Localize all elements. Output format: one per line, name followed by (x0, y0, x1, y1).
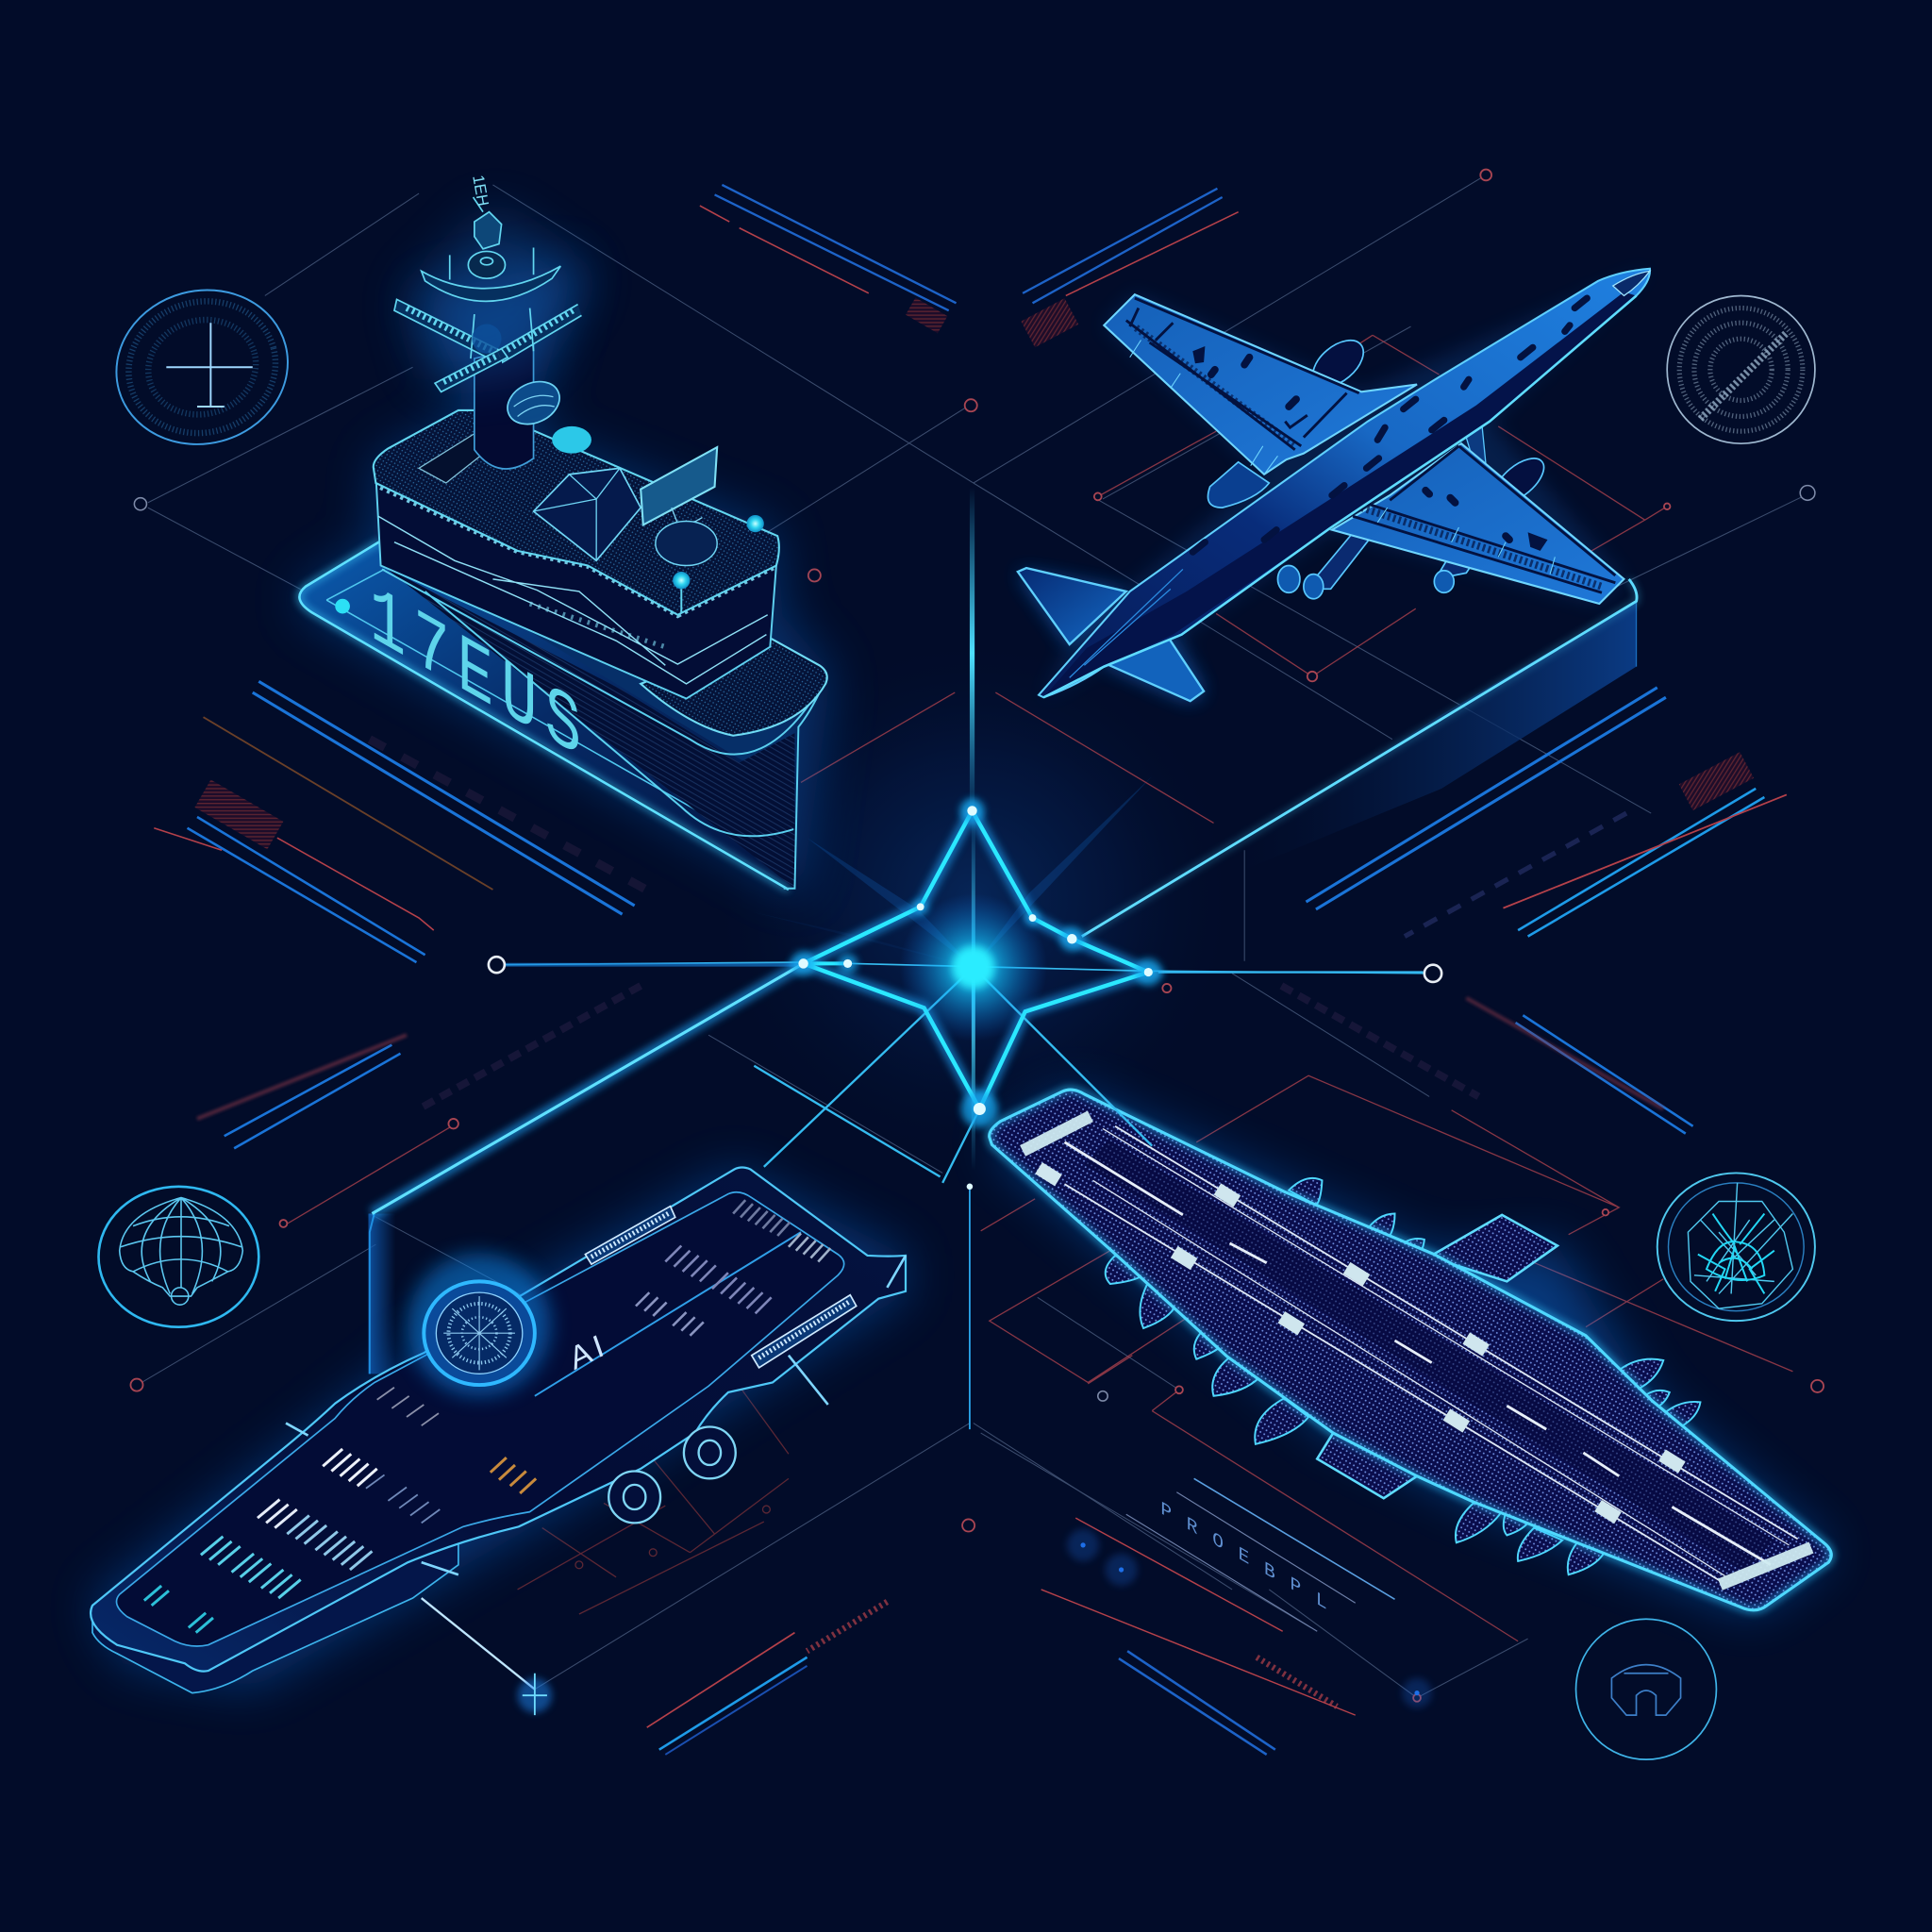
deck (990, 1090, 1831, 1610)
aircraft glow (1018, 269, 1650, 701)
pedestal (656, 521, 717, 566)
side fins (1106, 1178, 1700, 1574)
circular badge: terrain scan (1657, 1173, 1815, 1321)
plate dot (335, 599, 350, 613)
pyramid housing (534, 468, 641, 560)
device label: AI (565, 1326, 612, 1377)
circular badge: aircraft radar (99, 271, 305, 463)
tablet circuit traces (518, 1386, 789, 1614)
device top (91, 1168, 906, 1672)
trace group: bottom left (647, 1602, 887, 1755)
barcode rows (144, 1449, 536, 1633)
dial glow (408, 1253, 551, 1396)
center wedges (752, 776, 1152, 967)
device glow (92, 1170, 906, 1688)
screen panel (641, 447, 717, 525)
thin grid lines (142, 175, 1805, 1698)
pattern cone (1466, 415, 1487, 478)
blue spark dots (1067, 1529, 1432, 1707)
hair lines (496, 962, 1433, 974)
circular badge: sonar rings (1667, 295, 1815, 443)
main deck (374, 410, 779, 615)
lower sponson (1317, 1433, 1417, 1498)
upper wing (1104, 294, 1417, 475)
fuselage (1039, 269, 1650, 697)
network glow (372, 810, 1148, 1214)
ship hull and plate (299, 258, 832, 899)
deck hatch (419, 434, 492, 483)
forward deck (641, 635, 827, 736)
long arm (372, 963, 804, 1214)
star nodes (791, 798, 1162, 1190)
left end node (489, 957, 505, 973)
central star network (372, 487, 1433, 1429)
island tower (1429, 1215, 1557, 1281)
hull side (385, 567, 794, 889)
carrier glow (990, 1091, 1832, 1613)
fuselage windows (1192, 298, 1587, 552)
tail fins (1018, 568, 1126, 644)
aircraft carrier (990, 1090, 1832, 1613)
connector nodes (130, 170, 1824, 1702)
red connector lines (283, 335, 1792, 1641)
core (899, 893, 1047, 1041)
trace group: top left (700, 185, 957, 333)
plate (299, 541, 798, 890)
circular badge: globe (98, 1187, 258, 1327)
ship mast (394, 174, 591, 391)
mast column (475, 345, 534, 469)
star outline (804, 810, 1148, 1109)
aircraft (1018, 269, 1650, 701)
diagonals (754, 967, 1152, 1183)
ship name: 17EUS (370, 569, 581, 781)
lower wing (1332, 443, 1624, 604)
ship superstructure (374, 345, 779, 699)
tablet support edge (370, 1212, 375, 1374)
deck edge glow (990, 1090, 1831, 1610)
lower tiers (375, 475, 776, 699)
trace group: bottom right (1041, 1478, 1395, 1755)
tablet support spark (422, 1598, 552, 1715)
deck edge (990, 1090, 1831, 1610)
trace group: lower left (197, 986, 641, 1148)
tail glow (1018, 572, 1204, 701)
trace group: left (154, 681, 653, 962)
cyan dome (552, 426, 591, 454)
styluses (585, 1207, 857, 1368)
right end node (1424, 965, 1441, 982)
runway lines (1023, 1116, 1811, 1585)
engines (1208, 331, 1552, 599)
trace group: right (1306, 688, 1787, 937)
mast top glyphs: 1EH (469, 174, 492, 208)
lower shell (92, 1541, 458, 1693)
mast glow (407, 209, 591, 382)
grey end nodes (134, 486, 1815, 1401)
ship glow (299, 258, 832, 899)
trace group: lower right (1281, 986, 1693, 1134)
runway dark lanes (1084, 1140, 1774, 1571)
aircraft platform (1082, 579, 1637, 937)
sphere lights (747, 515, 764, 532)
wheels (608, 1426, 736, 1523)
tablet device (91, 1168, 906, 1693)
trace group: top right (1021, 189, 1239, 347)
tablet support band (369, 1214, 395, 1374)
bottom runes text: PROEBPL (1160, 1498, 1341, 1624)
central halo (715, 641, 1232, 1158)
radar dish (501, 374, 566, 432)
circular badge: hangar arch (1576, 1619, 1716, 1759)
dial (424, 1281, 535, 1385)
